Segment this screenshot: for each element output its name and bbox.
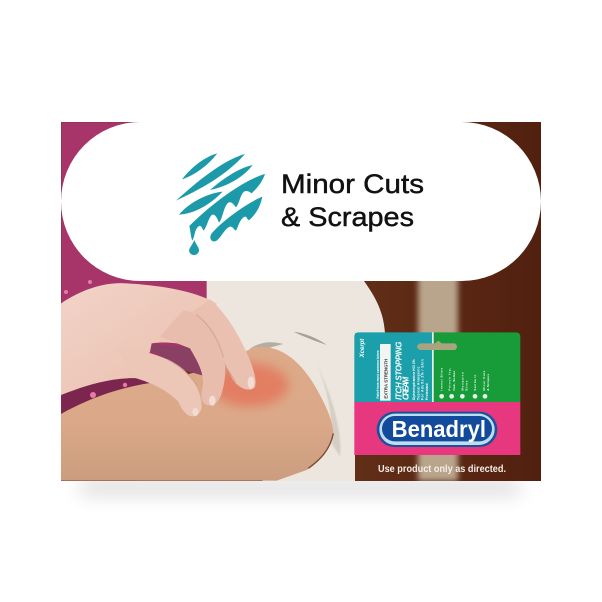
ring finger bbox=[136, 353, 202, 416]
gap between fingers bbox=[150, 344, 202, 376]
white divider bbox=[432, 332, 434, 403]
white shirt sleeve bbox=[207, 280, 385, 483]
icon: scratches with blood drip bbox=[176, 153, 265, 255]
card teal text: Topical Analgesic bbox=[416, 367, 420, 400]
fingernails bbox=[192, 376, 254, 416]
card green panel bbox=[434, 332, 520, 403]
card teal text: ITCH STOPPING bbox=[395, 342, 404, 400]
finger creases bbox=[168, 315, 235, 385]
product card: Benadryl bbox=[354, 332, 520, 455]
heading: Minor Cuts bbox=[281, 169, 424, 199]
pale column in background bbox=[418, 270, 458, 481]
card teal text: Xcerpt bbox=[360, 338, 366, 358]
shirt dots bbox=[64, 280, 127, 398]
card teal text: For Adults 2% / Skin bbox=[421, 359, 425, 400]
card green text bbox=[440, 368, 490, 391]
card green text: Insect Bites bbox=[440, 368, 444, 391]
scratching hand bbox=[61, 283, 256, 416]
card teal text: CREAM bbox=[402, 376, 411, 400]
hang hole bbox=[417, 341, 457, 350]
card green text: Mosquito bbox=[460, 372, 464, 391]
forearm bbox=[61, 347, 333, 481]
card pink panel bbox=[354, 402, 520, 455]
title pill bbox=[61, 122, 541, 281]
card teal panel bbox=[354, 332, 432, 403]
heading bbox=[281, 169, 424, 232]
irritated red skin bbox=[212, 363, 288, 407]
card teal text: Relief from most common itches bbox=[376, 350, 380, 399]
disclaimer caption: Use product only as directed. bbox=[378, 464, 506, 475]
card green text: Oak, Sumac bbox=[452, 370, 456, 391]
card teal text: Protectant bbox=[425, 382, 429, 400]
heading: & Scrapes bbox=[281, 202, 414, 232]
Benadryl logo: Benadryl bbox=[392, 416, 486, 442]
card green text: Minor Cuts bbox=[482, 370, 486, 391]
photo background: brown room bbox=[61, 122, 541, 481]
card teal text: Diphenhydramine HCl 2% bbox=[412, 359, 416, 400]
middle finger bbox=[160, 310, 225, 405]
card green icons bbox=[439, 394, 487, 399]
Benadryl logo bbox=[377, 412, 497, 447]
card green text: Sunburn bbox=[473, 374, 477, 391]
card green text: Bites bbox=[464, 380, 468, 391]
pink shirt bbox=[61, 122, 207, 414]
card teal text bbox=[360, 338, 429, 400]
card green text: & Scrapes bbox=[486, 374, 490, 391]
card green text: Poison Ivy, bbox=[448, 368, 452, 391]
shirt shadow under hand bbox=[61, 378, 150, 414]
image drop shadow bbox=[80, 480, 520, 494]
photo: person scratching an itchy arm bbox=[61, 122, 541, 483]
card teal text: EXTRA STRENGTH bbox=[383, 359, 388, 399]
product label white box bbox=[380, 344, 391, 401]
back of hand bbox=[61, 283, 217, 395]
index finger bbox=[190, 299, 256, 390]
